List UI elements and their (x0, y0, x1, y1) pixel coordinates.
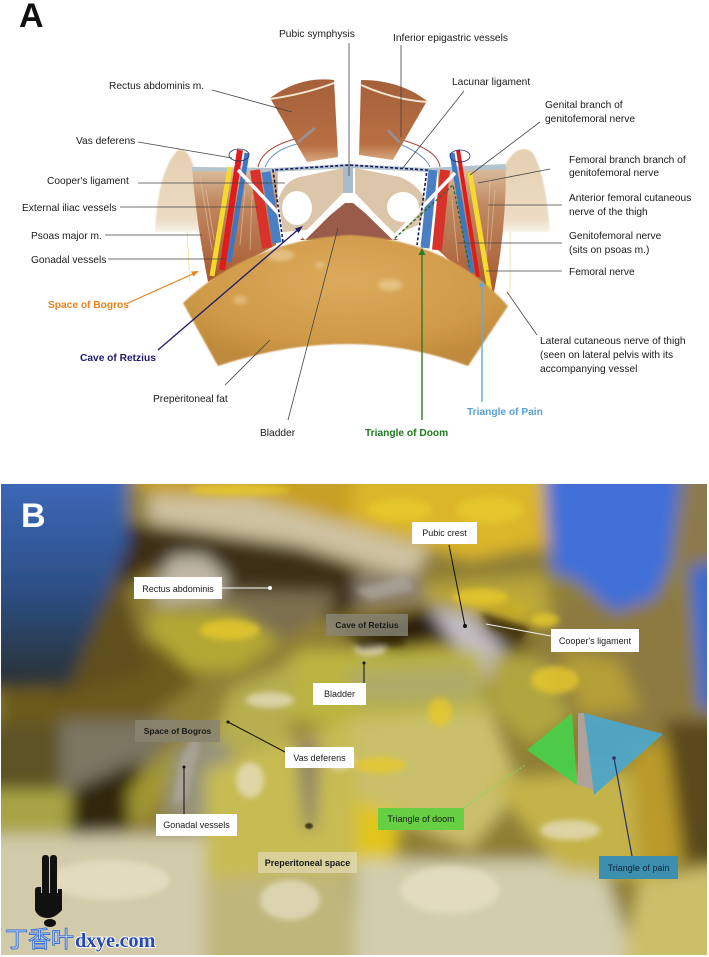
label: Cooper's ligament: Cooper's ligament (47, 176, 129, 187)
label: Femoral nerve: Femoral nerve (569, 267, 635, 278)
label: Lacunar ligament: Lacunar ligament (452, 77, 530, 88)
logo text: 丁香叶 (5, 926, 74, 952)
label: Preperitoneal fat: Preperitoneal fat (153, 394, 228, 405)
bone: left pubic ramus (278, 168, 343, 232)
label: Triangle of Doom: Triangle of Doom (365, 428, 448, 439)
label: Lateral cutaneous nerve: accompanying vessel (540, 364, 637, 375)
callout: Cooper's ligament (486, 624, 639, 652)
label: Cave of Retzius (80, 226, 303, 364)
right lateral wing (500, 149, 550, 232)
label: Lateral cutaneous nerve: (seen on lateral pelvis with its (540, 350, 673, 361)
photo detail: mottled fat and tissue highlights (50, 484, 600, 920)
left vas deferens (238, 170, 278, 213)
label: Lateral cutaneous nerve: Lateral cutaneous nerve of thigh (540, 336, 686, 347)
label: External iliac vessels: External iliac vessels (22, 203, 117, 214)
callout: Cave of Retzius (326, 614, 408, 636)
illustration: pelvis drawing (155, 79, 550, 366)
icon: hand silhouette (35, 855, 62, 927)
outer thigh nerve lines (187, 232, 510, 295)
label: Anterior femoral cutaneous nerve: nerve of the thigh (569, 207, 648, 218)
callout: Triangle of doom: Triangle of doom (387, 814, 455, 824)
preperitoneal fat (183, 235, 508, 366)
callout: Vas deferens: Vas deferens (293, 753, 346, 763)
label: Space of Bogros (48, 271, 199, 311)
right vas deferens (393, 173, 455, 238)
obturator foramen left (282, 191, 312, 225)
inferior epigastric vessels (258, 139, 440, 167)
left psoas muscle (192, 167, 278, 282)
callout: Cooper's ligament: Cooper's ligament (559, 636, 632, 646)
right psoas muscle (438, 166, 506, 292)
callout: Bladder (313, 662, 366, 705)
label: Lateral cutaneous nerve (507, 292, 686, 375)
dark fissure (305, 823, 313, 829)
callout: Preperitoneal space: Preperitoneal space (265, 858, 350, 868)
label: Femoral branch (478, 155, 686, 183)
label: Anterior femoral cutaneous nerve: Anterior femoral cutaneous (569, 193, 691, 204)
left iliac red vessel (255, 170, 267, 248)
rectus tendon lines (270, 83, 427, 102)
callout: Gonadal vessels: Gonadal vessels (163, 820, 230, 830)
label: Vas deferens (76, 136, 232, 158)
label: Bladder (260, 228, 338, 439)
label: Triangle of Pain: Triangle of Pain (467, 407, 543, 418)
label: Genital branch: genitofemoral nerve (545, 114, 635, 125)
grey strip between triangles (578, 713, 594, 790)
panel B: dissection photograph (0, 464, 709, 957)
callout: Rectus abdominis (134, 577, 272, 599)
callout: Vas deferens (226, 720, 354, 768)
label: Genitofemoral nerve: (sits on psoas m.) (569, 245, 649, 256)
callout: Space of Bogros: Space of Bogros (144, 726, 212, 736)
callout: Triangle of pain: Triangle of pain (608, 863, 669, 873)
callout: Pubic crest (412, 522, 477, 628)
label: Vas deferens: Vas deferens (76, 136, 135, 147)
right rectus abdominis muscle (359, 80, 427, 160)
photo: cadaveric dissection rendered as blurred colour fields (0, 464, 709, 957)
label: Femoral branch: Femoral branch branch of (569, 155, 686, 166)
callout: Cave of Retzius: Cave of Retzius (335, 620, 399, 630)
callout: Triangle of doom (378, 765, 525, 830)
left gonadal and nerve vessels (212, 150, 247, 276)
panel A: illustration of the preperitoneal anatomy (19, 0, 691, 439)
label: Rectus abdominis m.: Rectus abdominis m. (109, 81, 204, 92)
callout: Space of Bogros (135, 720, 220, 742)
fat highlights (233, 249, 402, 304)
pubic symphysis block (343, 165, 353, 193)
watermark logo: dxye.com (75, 930, 155, 952)
left rectus abdominis muscle (270, 79, 338, 162)
callout: Gonadal vessels (156, 766, 237, 836)
white V of bladder edge (303, 197, 395, 238)
label: Inferior epigastric vessels (393, 33, 508, 137)
label: Psoas major m.: Psoas major m. (31, 231, 102, 242)
callout: Pubic crest: Pubic crest (422, 528, 467, 538)
bladder (300, 203, 398, 240)
muscle striations (200, 175, 495, 270)
label: Cave of Retzius: Cave of Retzius (80, 353, 156, 364)
label: Femoral branch: genitofemoral nerve (569, 168, 659, 179)
left iliac blue vessel (266, 172, 277, 243)
right iliac red vessel (437, 170, 445, 250)
label: Preperitoneal fat (153, 340, 270, 405)
label: Triangle of Pain (467, 280, 543, 418)
label: Bladder: Bladder (260, 428, 296, 439)
label: Genital branch: Genital branch of (545, 100, 623, 111)
label: Genitofemoral nerve (458, 231, 662, 256)
label: Anterior femoral cutaneous nerve (488, 193, 691, 218)
label: Triangle of Doom (365, 248, 448, 439)
callout: Rectus abdominis: Rectus abdominis (142, 584, 214, 594)
green triangle: triangle of doom (527, 713, 577, 785)
watermark logo (5, 855, 155, 952)
left lateral wing (155, 150, 205, 232)
bone: right pubic ramus (355, 168, 428, 235)
top grey ligament band (192, 164, 507, 172)
label: Space of Bogros: Space of Bogros (48, 300, 129, 311)
heading: B: B (21, 497, 46, 535)
label: Genital branch (470, 100, 635, 175)
label: Gonadal vessels: Gonadal vessels (31, 255, 106, 266)
right gonadal and nerve vessels (452, 150, 490, 292)
Cave of Retzius dashed outline (273, 165, 427, 245)
callout: Triangle of pain (599, 756, 678, 879)
rectus grey vessel marks (298, 128, 400, 143)
label: Genitofemoral nerve: Genitofemoral nerve (569, 231, 662, 242)
callout: Bladder: Bladder (324, 689, 355, 699)
blue triangle: triangle of pain (584, 713, 663, 795)
Triangle of Doom dashed outline (395, 185, 470, 270)
label: Rectus abdominis m. (109, 81, 292, 112)
label: Pubic symphysis: Pubic symphysis (279, 29, 355, 40)
label: Lacunar ligament (402, 77, 530, 169)
label: Inferior epigastric vessels: Inferior epigastric vessels (393, 33, 508, 44)
vas loops (229, 149, 470, 162)
obturator foramen right (387, 192, 419, 222)
right iliac blue vessel (425, 170, 433, 248)
callout: Preperitoneal space (258, 852, 357, 873)
